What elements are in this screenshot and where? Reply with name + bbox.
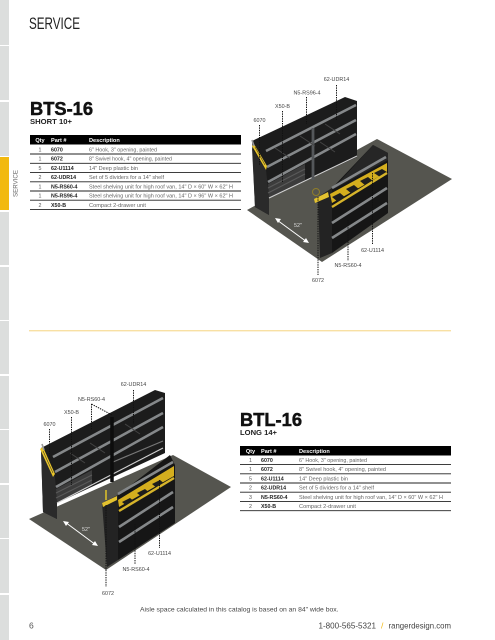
table rows: 6072 bbox=[51, 157, 63, 163]
page number: 6 bbox=[29, 620, 34, 630]
hook 6072 bbox=[102, 490, 117, 507]
table rows: 1 bbox=[39, 157, 42, 163]
table rows: Steel shelving unit for high roof van, 14" D × 60" W × 62" H bbox=[89, 184, 233, 190]
callout labels: N5-RS60-4 bbox=[335, 263, 361, 269]
table rows: Compact 2-drawer unit bbox=[299, 504, 357, 510]
hook 6070 bbox=[40, 444, 55, 477]
table header: Qty bbox=[35, 138, 46, 144]
table header: Description bbox=[299, 449, 330, 455]
callout labels: 6072 bbox=[102, 591, 114, 597]
callout labels: 62-UDR14 bbox=[121, 382, 146, 388]
active sidebar tab bbox=[0, 157, 9, 210]
table rows: Set of 5 dividers for a 14" shelf bbox=[299, 486, 375, 492]
table rows: 8" Swivel hook, 4" opening, painted bbox=[89, 157, 172, 163]
table rows: 8" Swivel hook, 4" opening, painted bbox=[299, 467, 386, 473]
table rows: Set of 5 dividers for a 14" shelf bbox=[89, 175, 165, 181]
table header: Description bbox=[89, 138, 120, 144]
table rows: N5-RS96-4 bbox=[51, 194, 78, 200]
floor bbox=[29, 455, 231, 570]
table rows: 1 bbox=[39, 194, 42, 200]
table rows: 1 bbox=[39, 147, 42, 153]
table rows: 14" Deep plastic bin bbox=[299, 476, 348, 482]
table header bbox=[240, 446, 451, 456]
callout labels: 62-U1114 bbox=[148, 551, 171, 557]
table rows: 1 bbox=[39, 184, 42, 190]
aisle arrow bbox=[275, 218, 309, 243]
sidebar tabs bbox=[0, 0, 9, 640]
table rows: 2 bbox=[249, 504, 252, 510]
callout labels: 62-UDR14 bbox=[324, 77, 349, 83]
table rows: 6070 bbox=[261, 458, 273, 464]
table rows: 3 bbox=[249, 495, 252, 501]
aisle arrow: 52" bbox=[294, 223, 302, 229]
table rows: 1 bbox=[249, 458, 252, 464]
callout labels bbox=[254, 77, 384, 284]
product subtitle: long: LONG 14+ bbox=[240, 430, 277, 437]
table rows: 6" Hook, 3" opening, painted bbox=[299, 458, 367, 464]
table rows: X50-B bbox=[261, 504, 276, 510]
table rows: 62-U1114 bbox=[261, 476, 284, 482]
back wall shelving bbox=[252, 97, 357, 215]
table header bbox=[30, 135, 241, 144]
sidebar label: SERVICE bbox=[12, 170, 20, 197]
floor bbox=[247, 139, 452, 262]
table rows: N5-RS60-4 bbox=[261, 495, 288, 501]
footer contact: 1-800-565-5321 bbox=[318, 620, 376, 630]
table rows: 62-UDR14 bbox=[261, 486, 286, 492]
table rows: 5 bbox=[39, 166, 42, 172]
callout labels: N5-RS96-4 bbox=[294, 90, 320, 96]
parts table: BTL-16 bbox=[240, 446, 451, 511]
aisle arrow bbox=[63, 521, 98, 546]
van shelving diagram: BTS-16 bbox=[247, 77, 452, 284]
table rows: 6070 bbox=[51, 147, 63, 153]
table rows: Compact 2-drawer unit bbox=[89, 203, 147, 209]
callout lines bbox=[260, 85, 372, 275]
table rows: 1 bbox=[249, 467, 252, 473]
callout labels: 6070 bbox=[254, 118, 266, 124]
table rows: N5-RS60-4 bbox=[51, 184, 78, 190]
product title: BTL-16: BTL-16 bbox=[240, 410, 302, 430]
hook 6070 bbox=[252, 140, 267, 170]
aisle footnote: Aisle space calculated in this catalog is based on an 84" wide box. bbox=[140, 606, 339, 614]
parts table: BTS-16 bbox=[30, 135, 241, 209]
front shelving unit bbox=[102, 455, 175, 567]
hook 6072 bbox=[312, 188, 329, 203]
table rows: 2 bbox=[39, 175, 42, 181]
front shelving unit bbox=[318, 145, 388, 258]
table rows: X50-B bbox=[51, 203, 66, 209]
table rows: Steel shelving unit for high roof van, 14" D × 96" W × 62" H bbox=[89, 194, 233, 200]
aisle arrow: 52" bbox=[82, 527, 90, 533]
callout labels: X50-B bbox=[275, 104, 290, 110]
table rows: 2 bbox=[249, 486, 252, 492]
footer contact bbox=[318, 620, 451, 630]
table rows: 62-U1114 bbox=[51, 166, 74, 172]
product subtitle: short: SHORT 10+ bbox=[30, 119, 72, 126]
section divider bbox=[29, 330, 451, 331]
table rows: 6072 bbox=[261, 467, 273, 473]
callout labels: N5-RS60-4 bbox=[78, 397, 105, 403]
footer contact: rangerdesign.com bbox=[388, 620, 451, 630]
table header: Part # bbox=[261, 449, 277, 455]
table header: Qty bbox=[246, 449, 256, 455]
table header: Part # bbox=[51, 138, 67, 144]
callout labels: N5-RS60-4 bbox=[123, 567, 149, 573]
table rows bbox=[30, 147, 241, 209]
van shelving diagram: BTL-16 bbox=[29, 382, 231, 597]
table rows bbox=[240, 458, 451, 511]
table rows: 14" Deep plastic bin bbox=[89, 166, 138, 172]
table rows: 6" Hook, 3" opening, painted bbox=[89, 147, 157, 153]
callout lines bbox=[50, 390, 160, 587]
table rows: Steel shelving unit for high roof van, 14" D × 60" W × 62" H bbox=[299, 495, 443, 501]
table rows: 62-UDR14 bbox=[51, 175, 76, 181]
callout labels: 6070 bbox=[44, 422, 56, 428]
footer contact: / bbox=[381, 620, 384, 630]
callout labels bbox=[44, 382, 171, 597]
back wall shelving bbox=[41, 390, 165, 519]
callout labels: X50-B bbox=[64, 410, 79, 416]
page heading: SERVICE bbox=[29, 15, 80, 33]
callout labels: 62-U1114 bbox=[361, 248, 384, 254]
callout labels: 6072 bbox=[312, 278, 324, 284]
table rows: 5 bbox=[249, 476, 252, 482]
product title: BTS-16: BTS-16 bbox=[30, 99, 93, 119]
table rows: 2 bbox=[39, 203, 42, 209]
